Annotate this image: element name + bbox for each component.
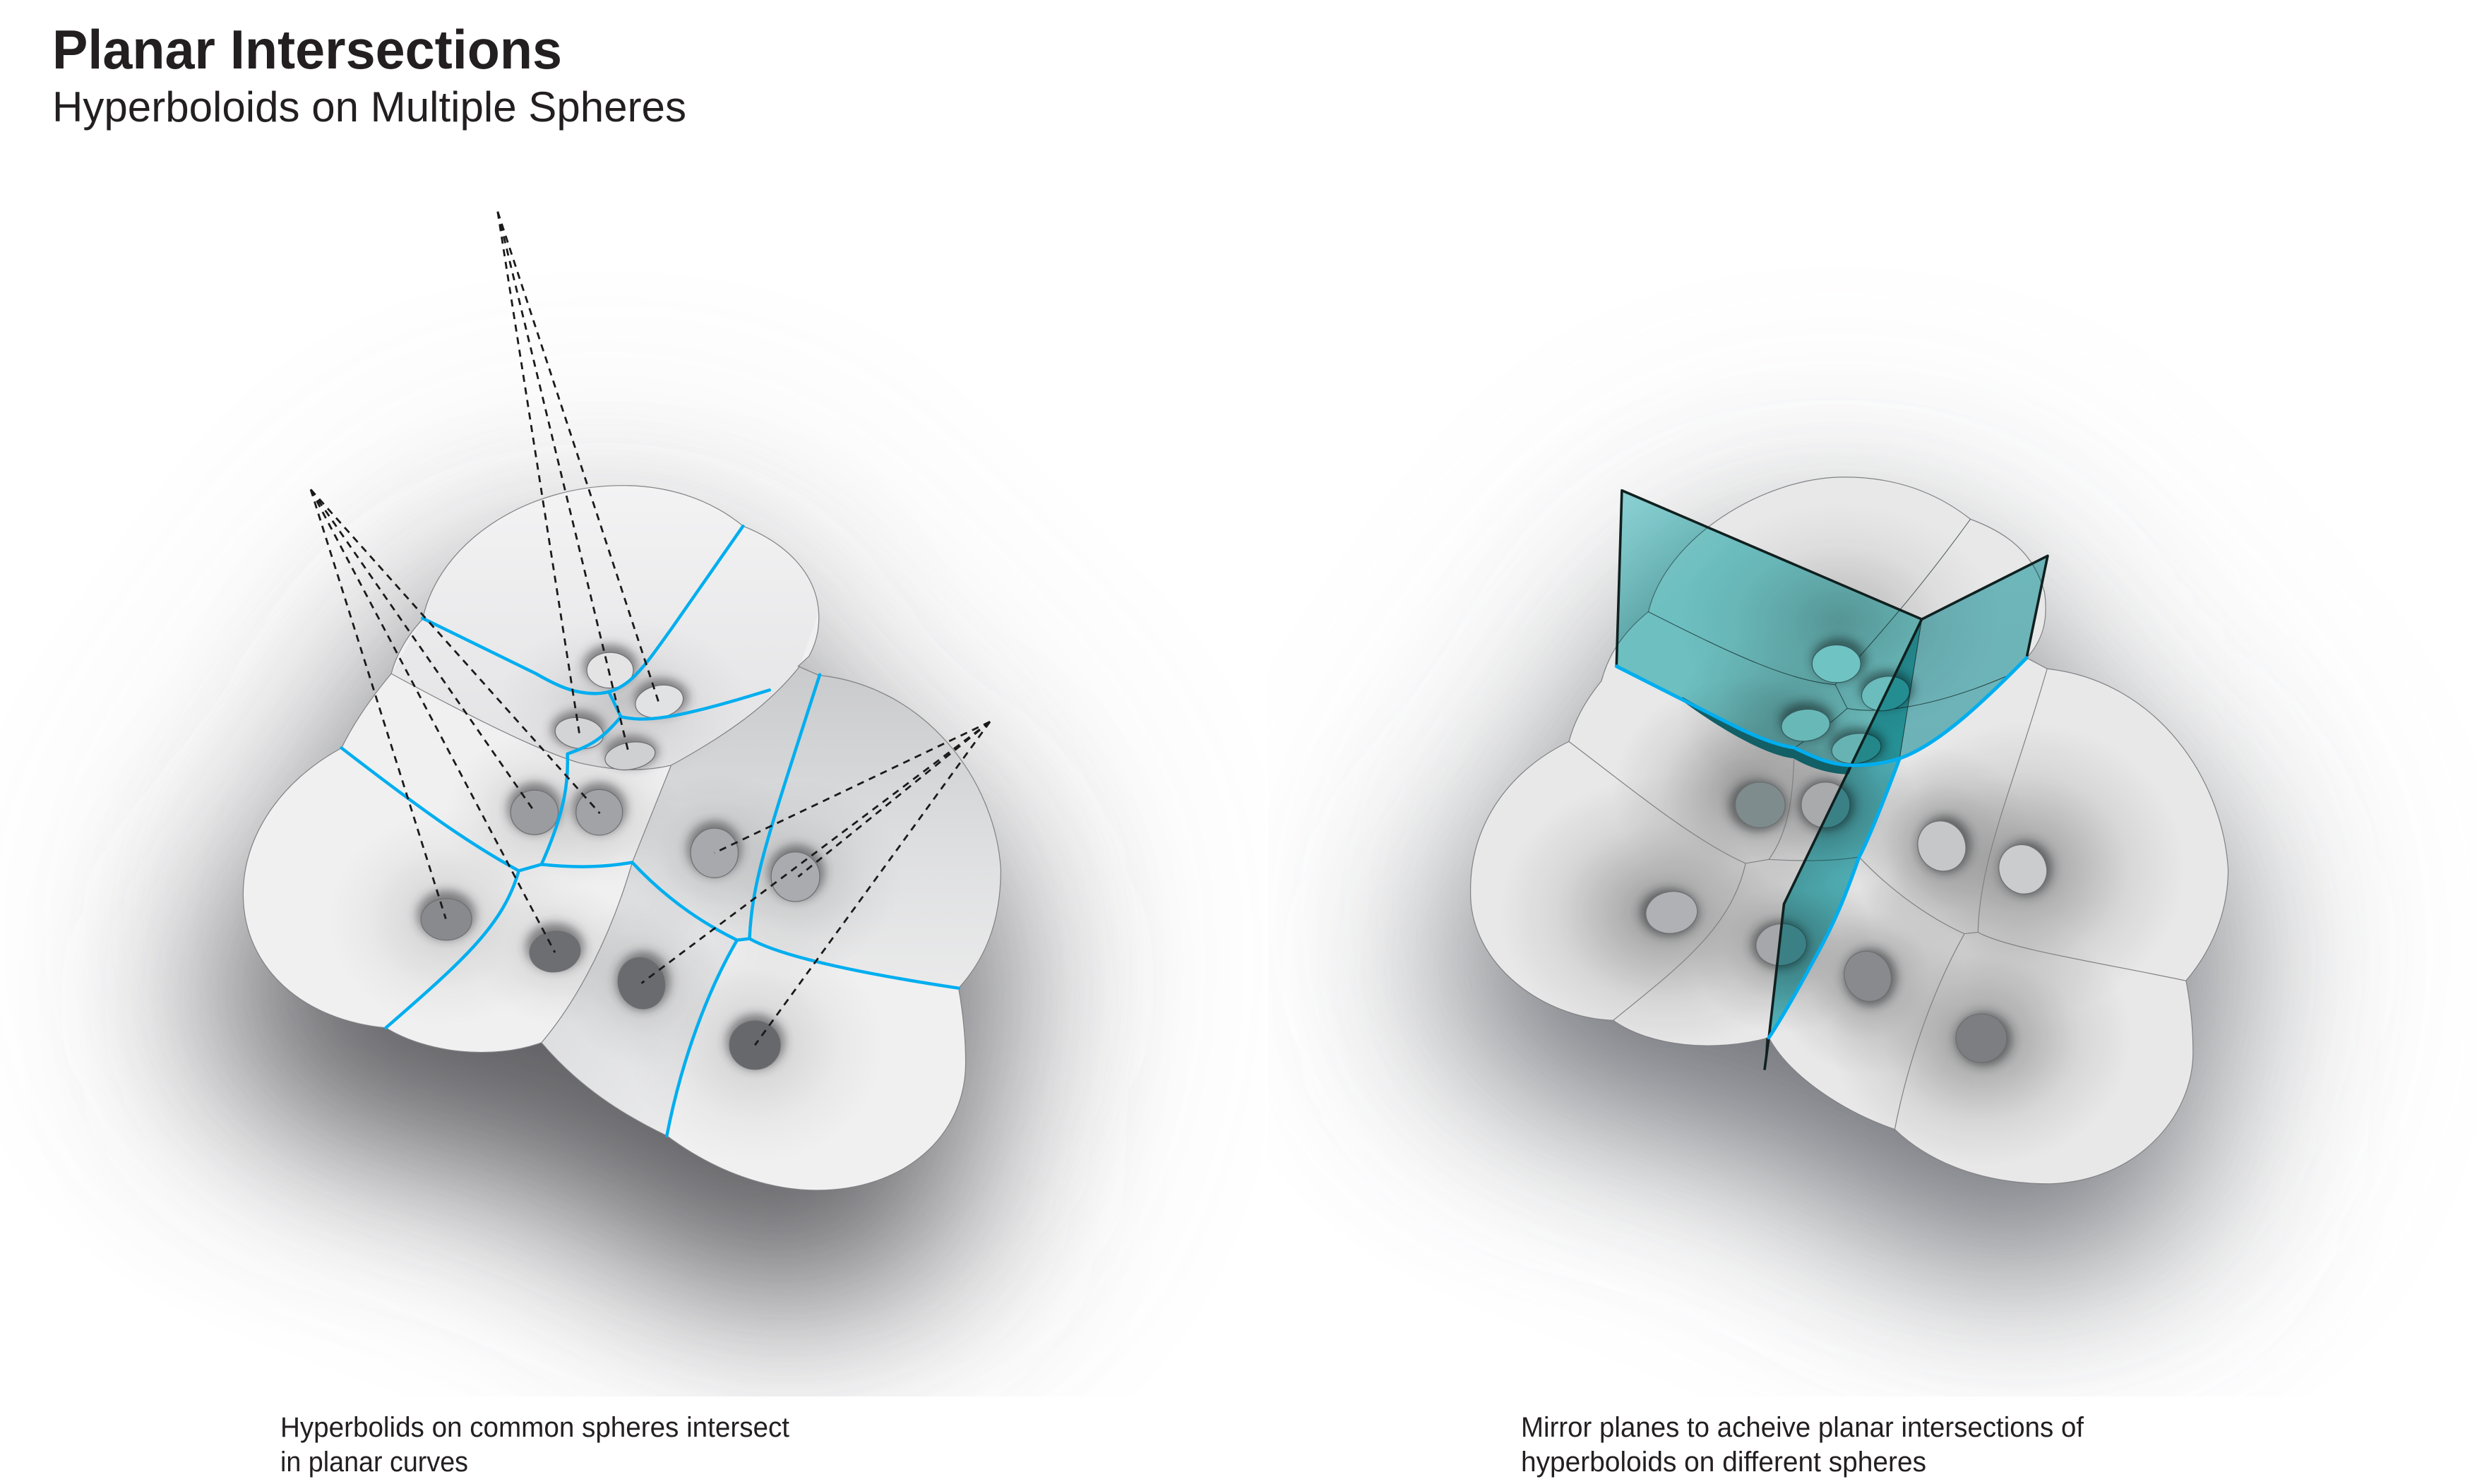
panel: right render, mirror planes xyxy=(1460,477,2228,1268)
surface base xyxy=(1471,477,2228,1184)
openings: right xyxy=(1640,638,2053,1066)
shadow under mirror plane xyxy=(1683,697,1853,774)
ground shadow: right xyxy=(1460,517,2223,1268)
cell: lower middle sphere xyxy=(542,863,737,1136)
caption: left: Hyperbolids on common spheres intersect xyxy=(280,1412,789,1443)
cell boundaries: left xyxy=(243,486,1001,1190)
cell: right shaded sphere xyxy=(632,666,1001,988)
mirror plane: rear right xyxy=(1899,556,2048,758)
soft shading around openings xyxy=(328,617,904,1164)
mirror intersection curve: blue xyxy=(1616,658,2027,1038)
caption: right: hyperboloids on different spheres xyxy=(1521,1447,1926,1478)
dashed projection lines: right focus xyxy=(641,722,990,1045)
planar intersection curves: blue xyxy=(342,526,959,1136)
caption: left: in planar curves xyxy=(280,1447,468,1478)
dashed projection lines: left focus xyxy=(311,489,599,952)
surface: right object xyxy=(1471,477,2228,1184)
ground shadow: left xyxy=(227,535,996,1299)
cell boundaries: right xyxy=(1471,477,2228,1184)
panel: left render, hyperboloids on common spheres xyxy=(227,212,1001,1299)
mirror plane: rear left xyxy=(1616,491,1922,765)
surface: left object xyxy=(243,212,1001,1190)
mirror plane sliver below surface xyxy=(1765,1038,1769,1070)
caption: right: Mirror planes to acheive planar intersections of xyxy=(1521,1412,2084,1443)
openings: left xyxy=(417,645,825,1070)
surface base xyxy=(243,486,1001,1190)
subtitle: Hyperboloids on Multiple Spheres xyxy=(52,83,686,131)
dashed projection lines: top focus xyxy=(498,212,659,755)
soft shading around openings xyxy=(1498,503,2185,1167)
title: Planar Intersections xyxy=(52,18,562,80)
caption: right xyxy=(1521,1412,2084,1478)
caption: left xyxy=(280,1412,789,1478)
mirror plane: front xyxy=(1769,619,1922,1038)
mirror plane edges xyxy=(1616,491,2048,1070)
cell: upper lobe xyxy=(391,486,818,770)
